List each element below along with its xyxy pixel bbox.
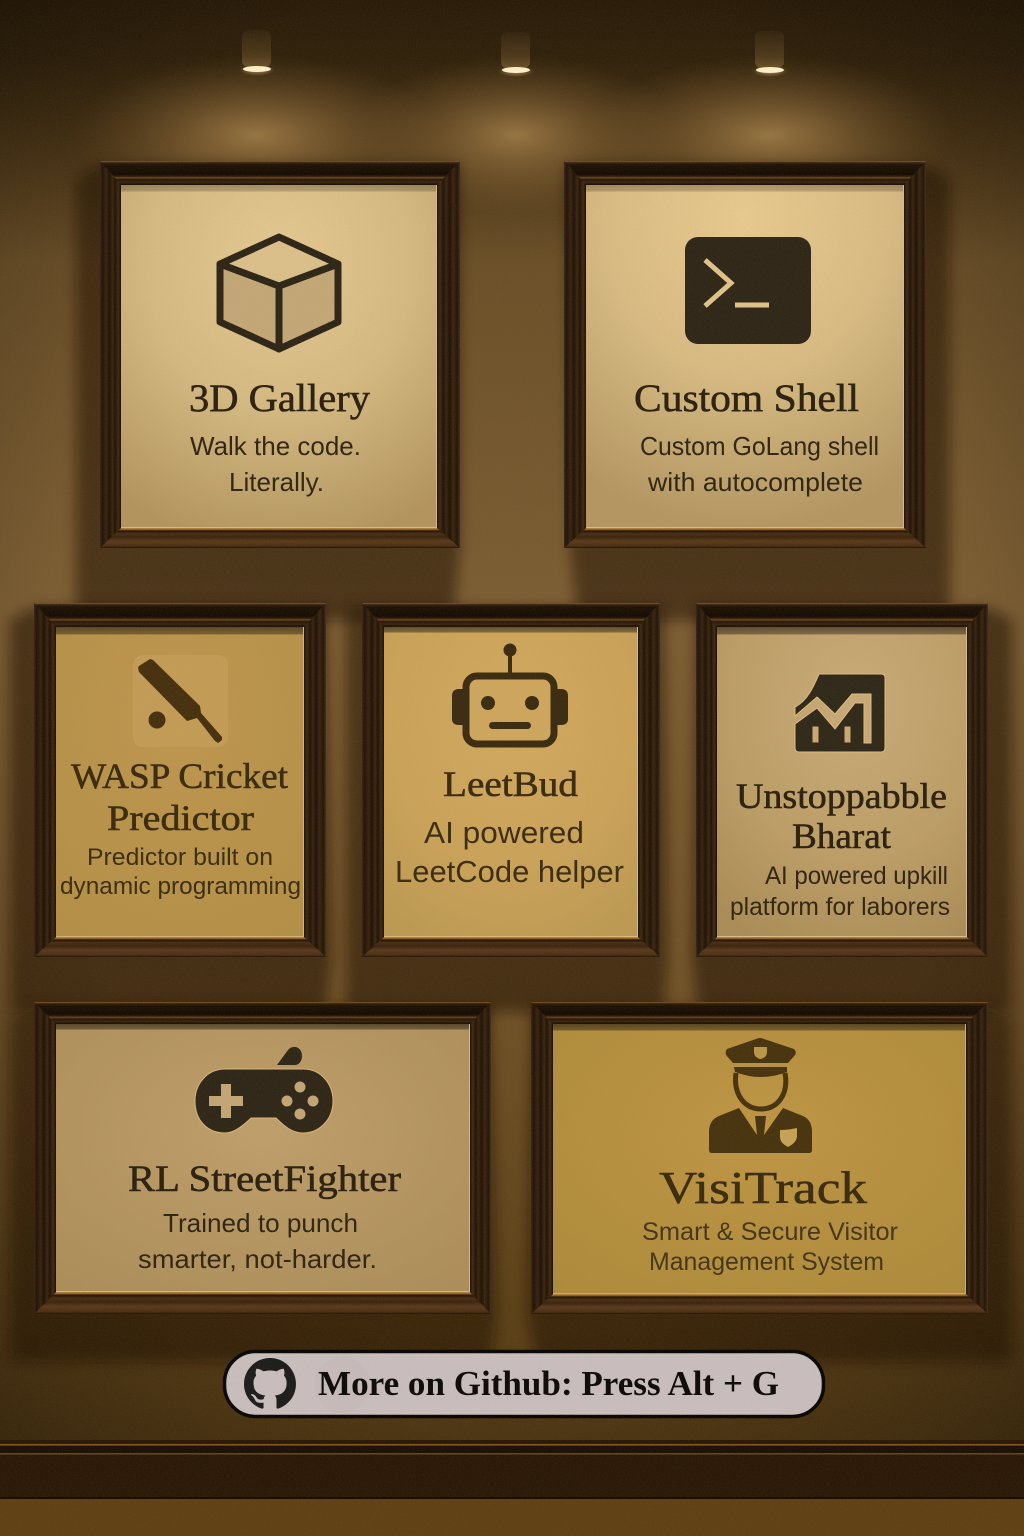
frame [362, 603, 660, 957]
canvas [384, 627, 638, 937]
description [60, 844, 301, 900]
description: Walk the code. [190, 431, 361, 461]
title [736, 776, 947, 856]
frame [34, 603, 326, 957]
icon: growth chart [795, 674, 885, 752]
description: Management System [649, 1248, 884, 1276]
title: Bharat [792, 816, 891, 856]
icon: robot [452, 644, 568, 744]
canvas [586, 185, 904, 528]
icon: github [244, 1358, 296, 1409]
icon: cricket bat and ball [133, 655, 228, 747]
description [730, 862, 950, 921]
description [190, 431, 361, 497]
icon: security officer [709, 1038, 812, 1153]
panel: 3D Gallery [76, 161, 460, 620]
frame [564, 161, 926, 548]
skirting board and floor [0, 1440, 1024, 1536]
title: RL StreetFighter [128, 1159, 401, 1200]
title: LeetBud [443, 764, 578, 804]
lamp 2 [498, 32, 534, 77]
frame [100, 161, 460, 548]
description: with autocomplete [647, 467, 863, 497]
panel: Unstoppabble Bharat [692, 603, 1012, 1012]
description: Smart & Secure Visitor [642, 1218, 898, 1246]
frame [34, 1002, 491, 1314]
description: smarter, not-harder. [138, 1244, 377, 1274]
description: LeetCode helper [395, 854, 624, 889]
canvas [553, 1024, 966, 1294]
description: AI powered upkill [765, 862, 948, 890]
description: dynamic programming [60, 873, 301, 900]
button label: More on Github: Press Alt + G [318, 1364, 779, 1403]
icon: terminal [685, 237, 811, 344]
lamp 3 [752, 31, 788, 77]
title: Custom Shell [634, 377, 859, 420]
title: Predictor [107, 798, 254, 838]
title [71, 756, 288, 838]
title: Unstoppabble [736, 776, 947, 816]
github button [224, 1352, 824, 1416]
icon: cube [220, 237, 338, 349]
lamp 1 [239, 30, 275, 76]
frame [696, 603, 988, 957]
ceiling lamps [239, 30, 788, 77]
panel: VisiTrack [527, 1002, 1012, 1362]
description [642, 1218, 898, 1276]
description: Predictor built on [87, 844, 273, 871]
canvas [121, 185, 437, 528]
title: 3D Gallery [189, 377, 371, 420]
description [138, 1208, 377, 1274]
description: platform for laborers [730, 893, 950, 921]
panel: LeetBud [346, 603, 668, 1012]
panel: Custom Shell [564, 161, 950, 620]
panel: RL StreetFighter [10, 1002, 497, 1362]
canvas [56, 1024, 470, 1292]
canvas [717, 627, 967, 937]
canvas [56, 627, 304, 937]
description [395, 815, 624, 889]
panel: WASP Cricket Predictor [10, 603, 332, 1012]
description [640, 431, 879, 497]
description: Trained to punch [163, 1208, 358, 1238]
title: WASP Cricket [71, 756, 288, 796]
title: VisiTrack [659, 1162, 867, 1213]
frame [531, 1002, 988, 1314]
icon: game controller [195, 1047, 333, 1133]
description: AI powered [424, 815, 584, 850]
description: Custom GoLang shell [640, 431, 879, 461]
description: Literally. [229, 467, 324, 497]
